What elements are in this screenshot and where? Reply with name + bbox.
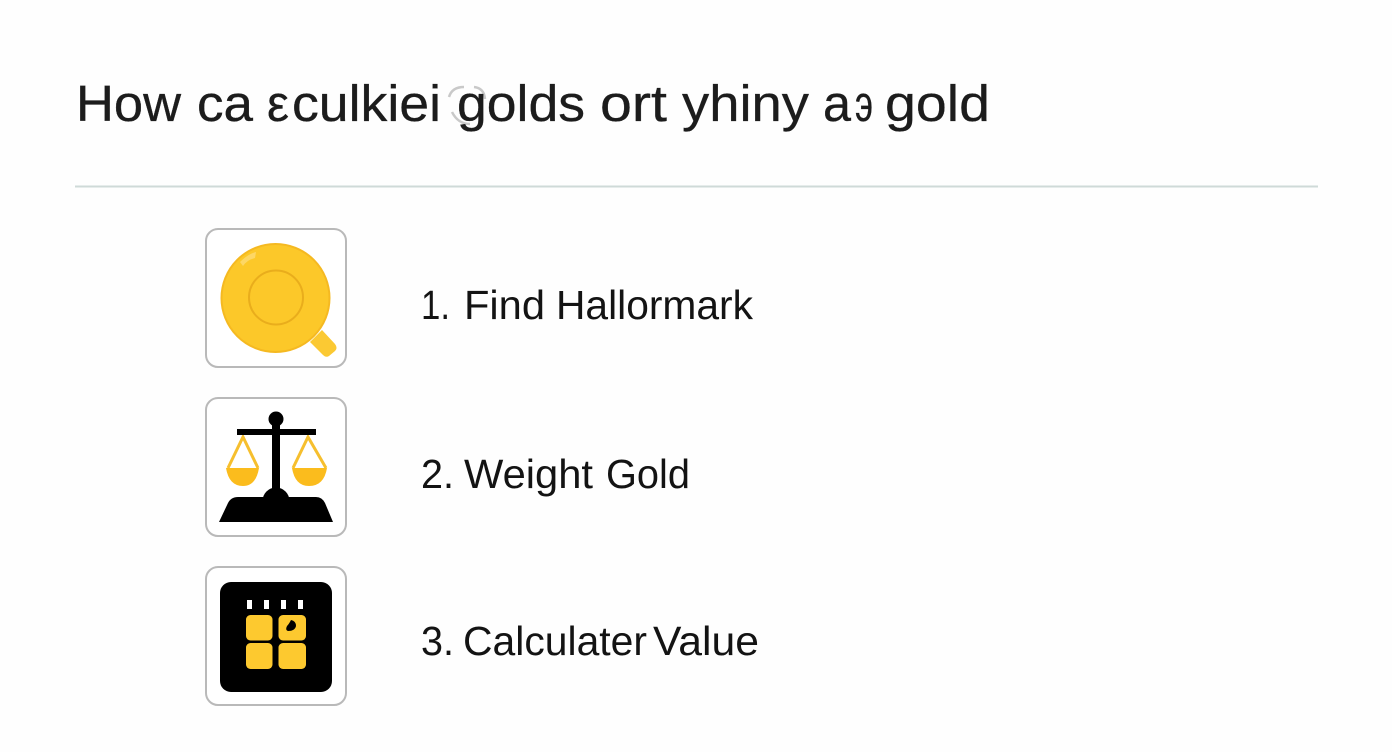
step 3: calculate value [206, 567, 759, 705]
label: step 3: 3. [421, 618, 454, 664]
title: ε [267, 75, 289, 132]
label: step 3: Calculater [463, 618, 647, 664]
title: ort [600, 75, 667, 132]
label: step 3 [421, 618, 759, 664]
label: step 3: Value [653, 618, 759, 664]
title [76, 75, 990, 132]
label: step 1: Find [464, 282, 545, 328]
icon: balance scale [206, 398, 346, 536]
step 1: find hallmark [206, 229, 753, 367]
title: gold [885, 75, 990, 132]
title: ca [197, 75, 254, 132]
title: yhiny [682, 75, 810, 132]
title: How [76, 75, 181, 132]
title: culkiei [292, 75, 441, 132]
icon: calculator [206, 567, 346, 705]
label: step 2: 2. [421, 451, 454, 497]
label: step 2: Weight [464, 451, 594, 497]
title: a [823, 75, 852, 132]
step 2: weigh gold [206, 398, 690, 536]
label: step 1: Hallormark [556, 282, 753, 328]
label: step 1: 1. [421, 282, 450, 328]
title: golds [457, 75, 585, 132]
label: step 2: Gold [606, 451, 690, 497]
icon: gold coin magnifier [206, 229, 346, 367]
label: step 1 [421, 282, 753, 328]
label: step 2 [421, 451, 690, 497]
title: э [855, 75, 873, 132]
